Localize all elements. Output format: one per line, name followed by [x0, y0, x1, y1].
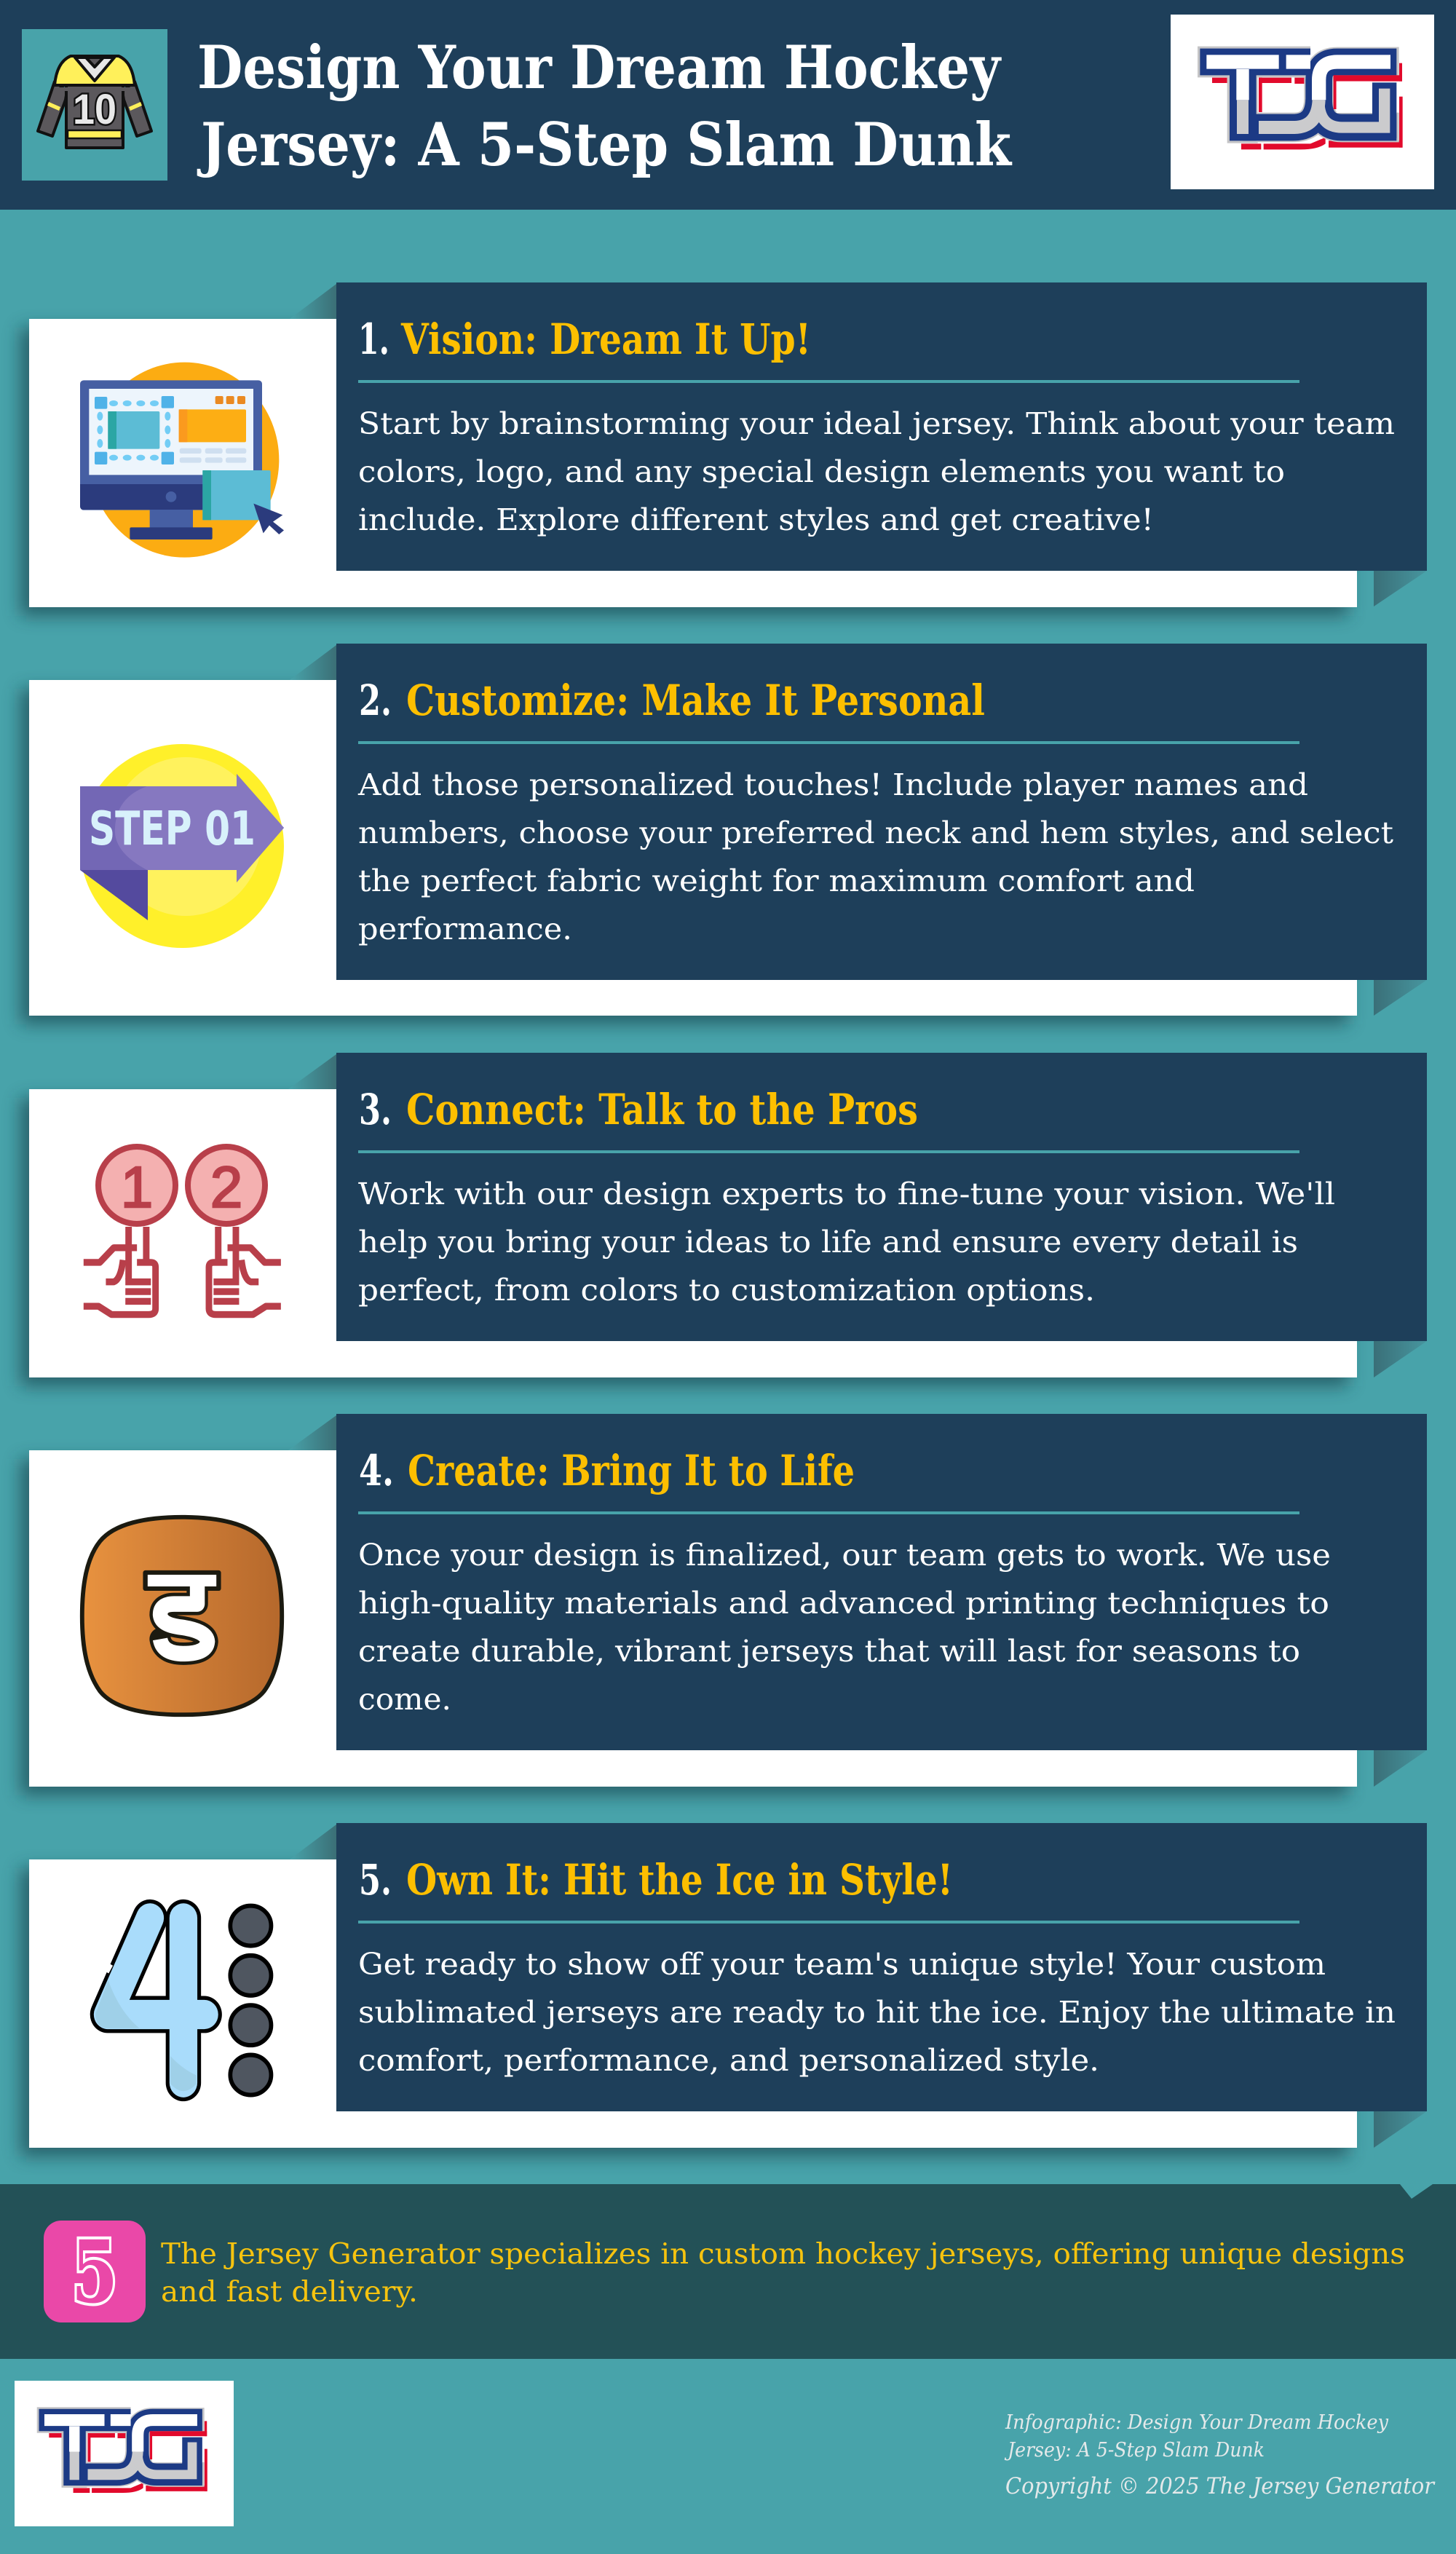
- icon: number four with dots: [95, 1906, 271, 2095]
- card 1 body text: [358, 406, 1395, 537]
- card 5 body text: Get ready to show off your team's unique style! Your custom: [358, 1947, 1326, 1982]
- icon: hands holding numbered paddles: 1: [121, 1155, 153, 1219]
- card 3 body text: help you bring your ideas to life and ensure every detail is: [358, 1225, 1298, 1260]
- card 4 heading: Create: Bring It to Life: [408, 1446, 855, 1495]
- card 4 body text: [358, 1538, 1331, 1717]
- card 3: Connect: [20, 1053, 1427, 1386]
- card 5 bottom fold: [1374, 2111, 1427, 2148]
- card 1 body text: Start by brainstorming your ideal jersey. Think about your team: [358, 406, 1395, 441]
- footer credits: Jersey: A 5-Step Slam Dunk: [1004, 2439, 1265, 2462]
- card 5 body text: [358, 1947, 1396, 2078]
- card 5 top fold: [290, 1824, 336, 1859]
- card 2 body text: numbers, choose your preferred neck and hem styles, and select: [358, 815, 1394, 850]
- icon: hands holding numbered paddles: [84, 1147, 281, 1315]
- card 2 heading: Customize: Make It Personal: [406, 676, 985, 725]
- band notch: [1400, 2184, 1433, 2199]
- card 1 bottom fold: [1374, 571, 1427, 606]
- card 2: Customize: [20, 644, 1427, 1024]
- card 1: Vision: [20, 282, 1427, 616]
- card 4: Create: [20, 1414, 1427, 1795]
- card 3 navy text panel: [336, 1053, 1427, 1341]
- footer credits: Infographic: Design Your Dream Hockey: [1005, 2411, 1389, 2434]
- card 3 bottom fold: [1374, 1341, 1427, 1377]
- icon: computer screen with cursor: [80, 363, 284, 558]
- icon: pink number five: 5: [71, 2221, 118, 2322]
- icon: hockey jersey: [22, 29, 167, 181]
- card 1 heading: Vision: Dream It Up!: [400, 315, 811, 364]
- summary band: [0, 2184, 1456, 2359]
- summary text: The Jersey Generator specializes in custom hockey jerseys, offering unique designs: [161, 2238, 1405, 2271]
- card 4 white icon panel: [29, 1450, 1357, 1787]
- logo: footer TJG: [15, 2381, 234, 2526]
- summary text: and fast delivery.: [161, 2276, 418, 2309]
- card 3 body text: Work with our design experts to fine-tune your vision. We'll: [358, 1177, 1335, 1211]
- card 1 navy text panel: [336, 282, 1427, 571]
- card 5 heading: Own It: Hit the Ice in Style!: [406, 1855, 953, 1905]
- card 1 top fold: [290, 284, 336, 319]
- title: Design Your Dream Hockey: [197, 33, 1002, 103]
- card 1 body text: include. Explore different styles and get creative!: [358, 502, 1154, 537]
- card 1 white icon panel: [29, 319, 1357, 607]
- card 2 shadow: [20, 689, 1348, 1024]
- card 3 white icon panel: [29, 1089, 1357, 1377]
- card 2 body text: [357, 767, 1394, 946]
- card 5 shadow: [20, 1868, 1348, 2156]
- icon: step 01 arrow: [80, 744, 284, 948]
- card 5 body text: comfort, performance, and personalized style.: [358, 2043, 1099, 2078]
- card 4 heading: 4.: [359, 1446, 394, 1495]
- card 1 body text: colors, logo, and any special design elements you want to: [358, 454, 1285, 489]
- card 1 shadow: [20, 328, 1348, 616]
- card 3 heading: 3.: [359, 1085, 392, 1134]
- title: [197, 33, 1013, 180]
- card 2 body text: Add those personalized touches! Include player names and: [357, 767, 1308, 802]
- card 4 bottom fold: [1374, 1750, 1427, 1787]
- card 4 body text: create durable, vibrant jerseys that will last for seasons to: [358, 1634, 1300, 1669]
- card 4 body text: Once your design is finalized, our team gets to work. We use: [358, 1538, 1331, 1573]
- card 2 white icon panel: [29, 680, 1357, 1016]
- header bar: [0, 0, 1456, 210]
- card 4 body text: high-quality materials and advanced printing techniques to: [358, 1586, 1329, 1621]
- footer credits: [1004, 2411, 1436, 2499]
- card 2 navy text panel: [336, 644, 1427, 980]
- card 4 body text: come.: [358, 1682, 451, 1717]
- card 2 bottom fold: [1374, 980, 1427, 1016]
- card 5 heading: 5.: [359, 1855, 392, 1905]
- card 3 heading: Connect: Talk to the Pros: [406, 1085, 918, 1134]
- card 3 top fold: [288, 1054, 336, 1089]
- card 4 shadow: [20, 1459, 1348, 1795]
- card 5 body text: sublimated jerseys are ready to hit the ice. Enjoy the ultimate in: [358, 1995, 1396, 2030]
- card 2 top fold: [290, 645, 336, 680]
- card 2 body text: performance.: [358, 912, 572, 946]
- card 4 navy text panel: [336, 1414, 1427, 1750]
- card 1 heading: 1.: [358, 315, 389, 364]
- card 3 body text: [358, 1177, 1335, 1308]
- title: Jersey: A 5-Step Slam Dunk: [197, 111, 1013, 180]
- card 3 shadow: [20, 1098, 1348, 1386]
- icon: hockey jersey: 10: [73, 86, 116, 133]
- card 3 body text: perfect, from colors to customization options.: [358, 1273, 1095, 1308]
- summary text: [161, 2238, 1405, 2309]
- icon: step 01 arrow: STEP 01: [89, 802, 256, 856]
- card 5 white icon panel: [29, 1859, 1357, 2148]
- card 2 heading: 2.: [359, 676, 392, 725]
- logo: header TJG: [1171, 15, 1434, 189]
- icon: hands holding numbered paddles: 2: [210, 1155, 242, 1219]
- card 2 body text: the perfect fabric weight for maximum comfort and: [358, 863, 1195, 898]
- card 4 top fold: [288, 1415, 336, 1450]
- card 5: Own It: [20, 1823, 1427, 2156]
- card 5 navy text panel: [336, 1823, 1427, 2111]
- footer credits: Copyright © 2025 The Jersey Generator: [1005, 2473, 1436, 2499]
- icon: pink number five: [44, 2221, 146, 2322]
- icon: orange squircle badge: [82, 1517, 282, 1715]
